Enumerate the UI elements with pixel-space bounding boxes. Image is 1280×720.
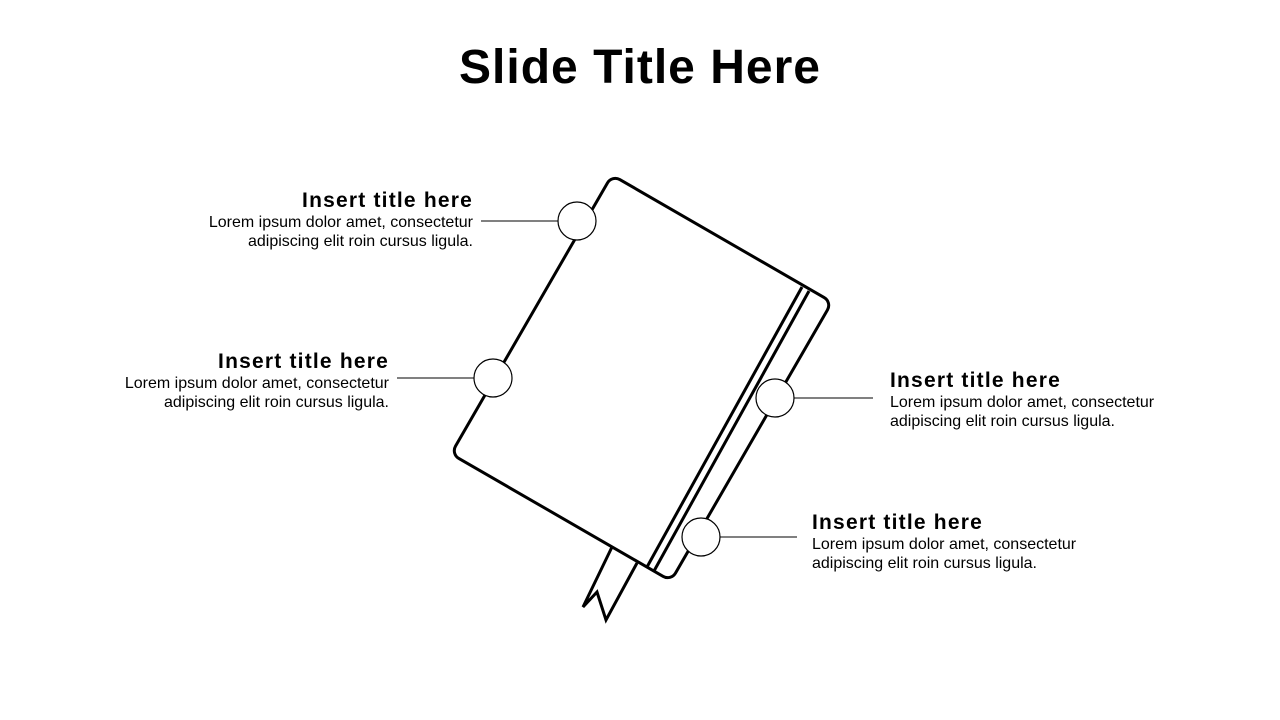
text block 4: Lorem ipsum dolor amet, consectetur	[812, 536, 1076, 553]
text block 2: Lorem ipsum dolor amet, consectetur	[125, 375, 389, 392]
bookmark ribbon	[583, 547, 637, 620]
text block 3: Lorem ipsum dolor amet, consectetur	[890, 394, 1154, 411]
text block 3: adipiscing elit roin cursus ligula.	[890, 413, 1115, 430]
text block 1	[209, 189, 473, 250]
title: Slide Title Here	[459, 41, 821, 94]
text block 4	[812, 511, 1076, 572]
text block 3: Insert title here	[890, 369, 1061, 392]
text block 1: Lorem ipsum dolor amet, consectetur	[209, 214, 473, 231]
text block 4: Insert title here	[812, 511, 983, 534]
text block 3	[890, 369, 1154, 430]
text block 2: Insert title here	[218, 350, 389, 373]
text block 4: adipiscing elit roin cursus ligula.	[812, 555, 1037, 572]
text block 1: Insert title here	[302, 189, 473, 212]
connector lines	[397, 221, 873, 537]
marker circles	[474, 202, 794, 556]
book cover	[451, 175, 832, 581]
book spine lines	[647, 287, 809, 571]
text block 1: adipiscing elit roin cursus ligula.	[248, 233, 473, 250]
text block 2	[125, 350, 389, 411]
text block 2: adipiscing elit roin cursus ligula.	[164, 394, 389, 411]
